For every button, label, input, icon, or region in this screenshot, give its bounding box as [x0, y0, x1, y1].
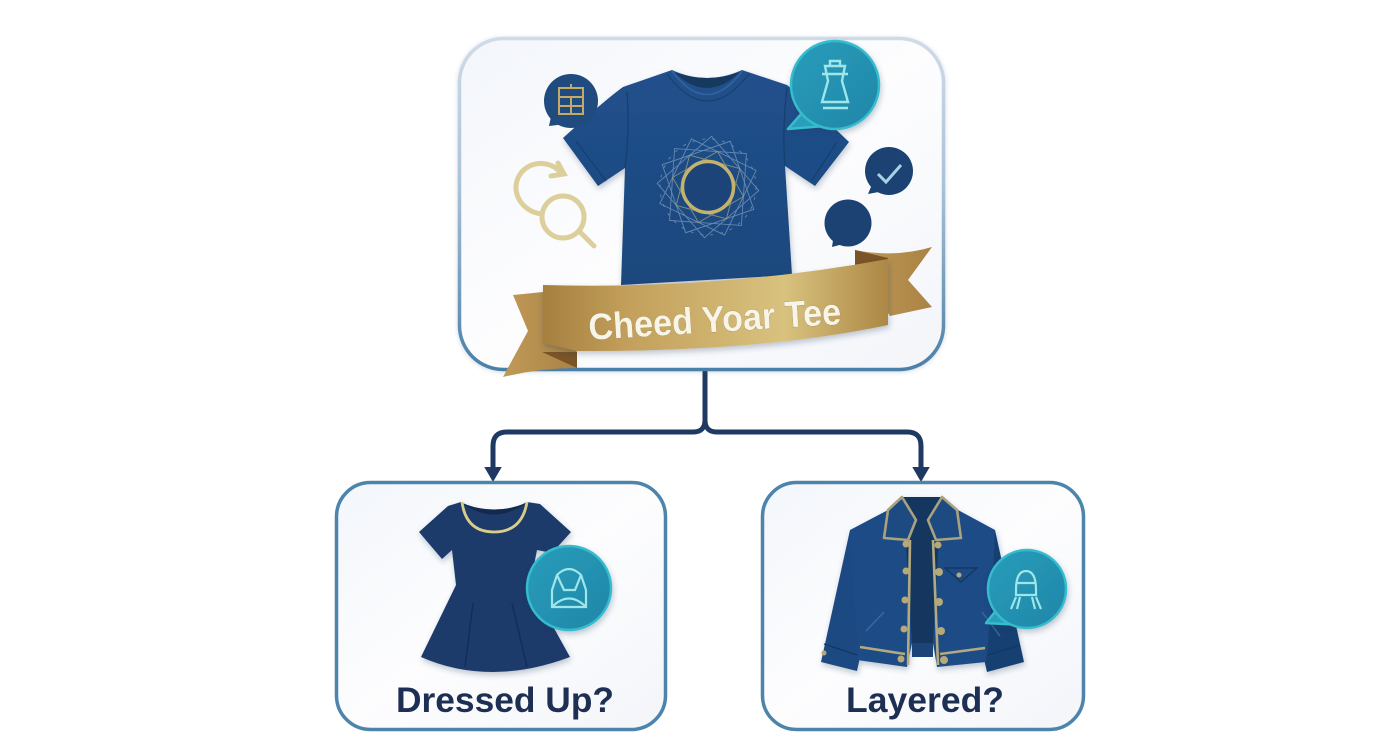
panel: Dressed Up? — [336, 482, 666, 730]
panel: Layered? — [762, 482, 1084, 730]
banner ribbon — [503, 247, 932, 377]
icon: check bubble — [865, 147, 913, 195]
icon: teal helmet speech bubble — [986, 550, 1066, 628]
panel frame — [336, 482, 666, 730]
t-shirt — [563, 70, 849, 285]
icon: navy calendar bubble — [544, 74, 598, 128]
t-shirt mandala print — [657, 136, 759, 238]
connector: tree from top panel to lower panels — [486, 370, 928, 480]
t-shirt gold ring — [682, 162, 734, 212]
label: Dressed Up? — [396, 681, 614, 720]
jacket — [821, 497, 1024, 672]
icon: plain bubble — [824, 200, 872, 247]
panel: Cheed Yoar Tee — [460, 38, 944, 377]
icon: teal jar speech bubble — [788, 41, 879, 129]
panel frame — [762, 482, 1084, 730]
icon: refresh and magnifier loops — [516, 163, 594, 246]
panel frame — [460, 38, 944, 370]
label: Layered? — [846, 681, 1004, 720]
dress — [419, 502, 571, 672]
banner title: Cheed Yoar Tee — [587, 291, 842, 348]
icon: teal cap badge — [527, 546, 611, 630]
